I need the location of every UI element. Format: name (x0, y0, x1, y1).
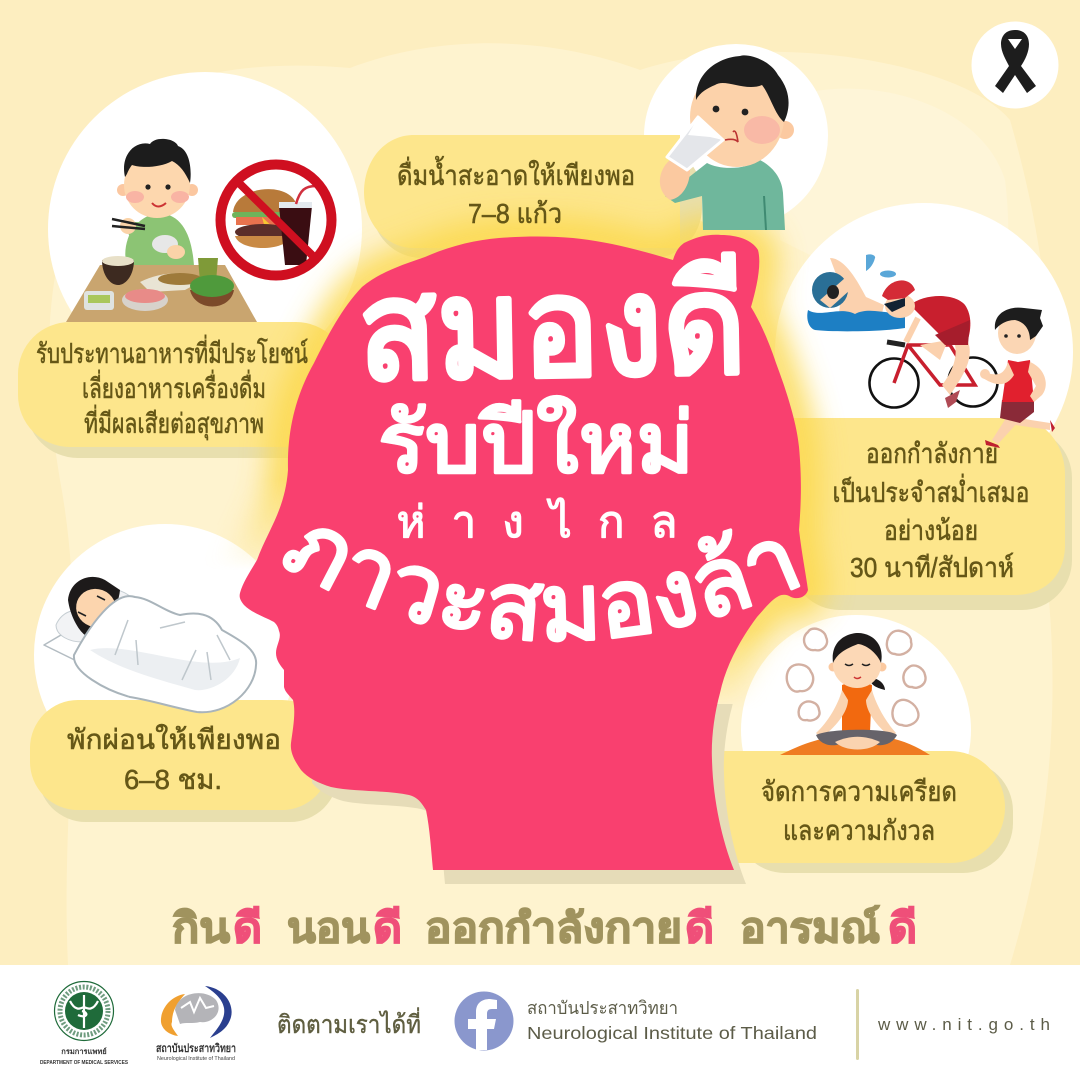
tagline: นอน (287, 905, 370, 951)
text: drink water advice: 7–8 แก้ว (468, 198, 562, 229)
tagline: กิน (172, 905, 230, 951)
text: healthy food advice (36, 335, 308, 441)
runner (980, 308, 1055, 448)
follow us label: ติดตามเราได้ที่ (277, 1007, 421, 1039)
text: exercise advice (832, 438, 1030, 583)
text: healthy food advice: ที่มีผลเสียต่อสุขภาพ (84, 405, 264, 441)
text: sleep advice: พักผ่อนให้เพียงพอ (67, 724, 281, 755)
tagline: ดี (685, 905, 714, 951)
tagline: ดี (233, 905, 262, 951)
footer (0, 965, 1080, 1080)
text: stress advice (761, 776, 957, 846)
ribbon badge (972, 22, 1058, 108)
icon: woman meditating (780, 629, 930, 755)
icon: boy eating at table (66, 139, 257, 322)
text: exercise advice: อย่างน้อย (884, 515, 978, 546)
white circles behind illustrations (34, 44, 1073, 845)
icon: facebook (454, 992, 514, 1050)
facebook page name: สถาบันประสาทวิทยา (527, 998, 678, 1018)
head shadow (312, 704, 746, 884)
panel: sleep (30, 700, 338, 822)
title (282, 246, 800, 642)
facebook page name (527, 998, 817, 1043)
text: sleep advice (67, 724, 281, 795)
tagline (172, 905, 917, 951)
tagline: ดี (888, 905, 917, 951)
title line 4: ภาวะสมองล้า (282, 528, 800, 642)
text: sleep advice: 6–8 ชม. (124, 764, 222, 795)
logo: department of medical services: กรมการแพทย์ (61, 1047, 107, 1056)
tagline: ออกกำลังกาย (425, 905, 682, 951)
website: www.nit.go.th (877, 1015, 1056, 1034)
icon: black ribbon (995, 30, 1036, 93)
text: drink water advice: ดื่มน้ำสะอาดให้เพียงพอ (397, 156, 635, 191)
text: drink water advice (397, 156, 635, 229)
title line 2: รับปีใหม่ (378, 396, 694, 490)
bicycle and cyclist (870, 280, 998, 408)
swimmer (807, 254, 905, 331)
text: stress advice: และความกังวล (783, 815, 935, 846)
panel: stress management (700, 751, 1013, 873)
icon: no fast food sign (220, 164, 332, 276)
text: stress advice: จัดการความเครียด (761, 776, 957, 807)
text: exercise advice: 30 นาที/สัปดาห์ (850, 552, 1014, 583)
panel: healthy food (18, 322, 348, 458)
head silhouette (240, 235, 808, 870)
text: exercise advice: เป็นประจำสม่ำเสมอ (832, 474, 1030, 508)
title line 1: สมองดี (357, 246, 747, 409)
tagline: อารมณ์ (740, 905, 880, 951)
text: exercise advice: ออกกำลังกาย (866, 438, 998, 469)
tagline: ดี (373, 905, 402, 951)
text: healthy food advice: เลี่ยงอาหารเครื่องดื่ม (82, 370, 266, 404)
title line 3: ห่างไกล (397, 497, 703, 547)
panel: exercise (760, 418, 1072, 610)
head glow (229, 200, 842, 704)
icon: triathlon athletes (807, 254, 1055, 448)
logo: department of medical services (40, 982, 128, 1066)
panel: drink water (364, 135, 702, 258)
icon: woman sleeping (44, 577, 256, 712)
logo: department of medical services: DEPARTMENT OF MEDICAL SERVICES (40, 1060, 128, 1066)
icon: boy drinking water (660, 55, 794, 230)
logo: neurological institute: Neurological Institute of Thailand (157, 1056, 235, 1062)
logo: neurological institute: สถาบันประสาทวิทยา (156, 1042, 236, 1055)
facebook page name: Neurological Institute of Thailand (527, 1023, 817, 1043)
logo: neurological institute (156, 986, 236, 1062)
text: healthy food advice: รับประทานอาหารที่มีประโยชน์ (36, 335, 308, 369)
